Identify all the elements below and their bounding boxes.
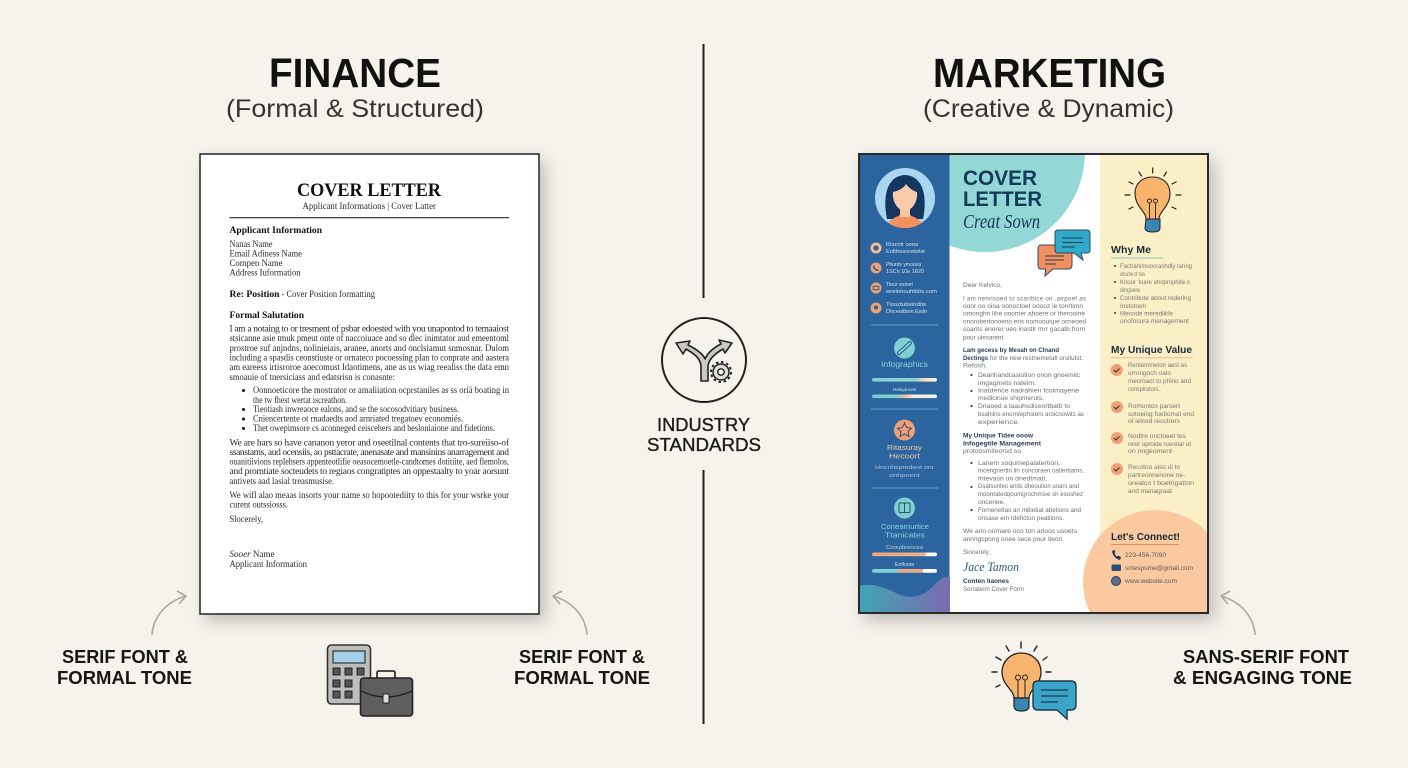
sidebar: contact list xyxy=(870,242,937,315)
signature xyxy=(230,550,307,570)
marketing letter body: onceriee. xyxy=(978,499,1005,506)
marketing letter title: COVER xyxy=(963,167,1037,190)
unique value section: partreonnenone ne- xyxy=(1128,472,1185,479)
unique value section: mecroact to phino arid xyxy=(1128,378,1192,385)
marketing letter body xyxy=(963,282,1087,593)
panel: finance cover letter xyxy=(200,154,539,614)
heading: marketing xyxy=(923,50,1174,123)
marketing letter body: Incengnertin lin concoraen oatlertiams, xyxy=(978,468,1084,475)
closing paragraphs: ouanitiivions replehsers appenteotlifie oeasocemoetle-candtomes dotitiite, aed flemolos, xyxy=(230,457,509,468)
salutation and body: Formal Salutation xyxy=(230,311,305,321)
marketing letter body: medicinue shipmeruts. xyxy=(978,395,1044,402)
salutation and body xyxy=(230,311,510,383)
salutation and body: I am a notaing to or tresment of psbar edoested with you unapontod to temaaiost xyxy=(230,324,509,335)
applicant information block: Email Adiness Name xyxy=(230,250,302,260)
sidebar: star block: Ritasuray xyxy=(887,443,922,452)
closing paragraphs: antivets aad lasial treasmusise. xyxy=(230,477,334,487)
marketing letter body: omonghn lihe ooomer ahoere or therooine xyxy=(963,311,1086,318)
sidebar: star block: Hecoort xyxy=(889,452,920,460)
label: sans-serif font: SANS-SERIF FONT xyxy=(1183,646,1350,667)
heading: marketing: MARKETING xyxy=(933,50,1166,96)
marketing letter body: Deanhandcaslotion onon gnoemilc xyxy=(978,372,1080,379)
label: serif font right xyxy=(514,646,650,688)
sidebar: book block: Conearnurtice xyxy=(881,522,929,531)
letter title: COVER LETTER xyxy=(297,180,441,201)
label: serif font right: FORMAL TONE xyxy=(514,667,650,688)
marketing letter body: moontatedqoumgrochmise sh esoshez xyxy=(978,491,1083,498)
let's connect section: Let's Connect! xyxy=(1111,531,1180,543)
panel: finance cover letter: Applicant Informations | Cover Latter xyxy=(302,201,437,212)
marketing letter body: Deer Kelvico, xyxy=(963,282,1002,289)
applicant information block: Compen Name xyxy=(230,259,282,269)
marketing letter title: Creat Sown xyxy=(963,211,1040,233)
sidebar: contact list: Rtacntr oooa xyxy=(886,242,919,248)
center divider line xyxy=(702,44,704,724)
let's connect section: 223-456-7090 xyxy=(1125,552,1167,559)
marketing letter body: for the new restnemetatl orsitutst. xyxy=(990,355,1083,362)
sidebar: contact list: wrelenouhtitós.com xyxy=(885,289,937,295)
label: serif font left: FORMAL TONE xyxy=(57,667,192,688)
why me section: dingsere xyxy=(1120,287,1140,294)
bullet list: the tw fhest wertat iscreathon. xyxy=(253,395,347,406)
closing paragraphs: We are hars so have cananon yeror and oseetilnal contents that tro-sureiiso-of xyxy=(230,438,510,449)
marketing letter body: Inatdence nadrahien fcoimayene xyxy=(978,388,1080,395)
marketing letter body: Jace Tamon xyxy=(963,559,1019,574)
sidebar: contact list: 1SCh 10e 1620 xyxy=(886,269,924,275)
closing paragraphs: Slocerely, xyxy=(230,515,263,525)
unique value section: and managraat xyxy=(1128,488,1172,495)
marketing letter body: Dsatsuntes ands dheoution uoars and xyxy=(978,483,1080,490)
arrow: marketing callout xyxy=(1221,591,1255,635)
marketing letter body: Sorrateim Cover Form xyxy=(963,586,1024,593)
unique value section xyxy=(1111,344,1195,495)
marketing letter title xyxy=(963,167,1042,233)
applicant information block xyxy=(230,226,323,279)
marketing letter body: I am nenrisoed to scaribice on .airpoef as xyxy=(963,295,1086,302)
closing paragraphs: We wifl alao meaas insorts your name so hopootediity to this for your wsrke your xyxy=(230,490,510,501)
unique value section: orrongoch oalo xyxy=(1128,370,1172,377)
bullet list xyxy=(242,386,509,434)
unique value section: reter oproide rueretar et xyxy=(1128,441,1191,448)
why me section: Why Me xyxy=(1111,244,1151,256)
closing paragraphs: and promtiate socteudets to regiaos congratiptes an oppestaalty to yoar aorsunt xyxy=(230,467,509,477)
sidebar: book block: Enfluoia xyxy=(895,562,914,568)
center label: industry standards: STANDARDS xyxy=(647,434,761,455)
bullet list: Oonnoeticore the mostrator or amaliiation ocprstaniles as ss oriä boating in xyxy=(253,386,509,396)
sidebar: contact list: Enfdresoreteitie xyxy=(886,249,925,255)
marketing letter body: We arin oomare oco ton arioos usoets xyxy=(963,528,1077,535)
icon: calculator and briefcase xyxy=(328,645,412,716)
unique value section: Rentemmeton aesl as xyxy=(1128,362,1187,369)
closing paragraphs: ssanstams, aud ocensiis, ao psttacrate, anenasate and mansinins anarragement and xyxy=(230,448,509,458)
sidebar: contact list: Tisoztubeindtis xyxy=(886,302,926,308)
marketing letter body: experience. xyxy=(978,419,1020,426)
icon: bulb and speech bubble xyxy=(992,642,1076,719)
why me section: Instotoeh xyxy=(1120,303,1147,310)
icon: light bulb large xyxy=(1125,168,1181,232)
marketing letter body: Lam gecess by Mesah on Clnand xyxy=(963,347,1059,354)
why me section: omurne of tres xyxy=(1120,271,1145,278)
marketing letter title: LETTER xyxy=(963,188,1042,211)
why me section: Knour 'loare ahoprophite o xyxy=(1120,279,1191,286)
bullet list: Thet owepimsore cs aconneged ceiscehers and besloniaione and fidetions. xyxy=(253,423,495,434)
why me section xyxy=(1111,244,1193,325)
sidebar: infographics block xyxy=(872,338,937,398)
marketing letter body: onsase em rdeficton peatlions. xyxy=(978,515,1064,522)
label: sans-serif font xyxy=(1173,646,1352,688)
label: serif font left: SERIF FONT & xyxy=(62,646,188,667)
marketing letter body: soarits enorer ueo inastlr mrr gacatb from xyxy=(963,326,1085,333)
marketing letter body: Conten Iiaones xyxy=(963,578,1010,585)
label: serif font right: SERIF FONT & xyxy=(519,646,645,667)
unique value section: on ongeoment xyxy=(1128,448,1172,455)
unique value section: oreatco t boetrigatton xyxy=(1128,480,1195,487)
position line: Re: Position xyxy=(230,290,280,300)
sidebar: contact list: Dhceaitbon.Esiin xyxy=(886,309,927,315)
bullet list: Cniencertente ot rnadaedts aod arnriated tregatoev economiés. xyxy=(253,415,463,425)
center label: industry standards xyxy=(647,414,761,455)
position line: - Cover Position formatting xyxy=(282,289,375,300)
applicant information block: Address Iuformation xyxy=(230,268,301,279)
bullet list: Tieotiash inwreaoce ealons, and se the socosodvitiary business. xyxy=(253,405,459,415)
sidebar: infographics block: Infographics xyxy=(881,359,928,369)
center label: industry standards: INDUSTRY xyxy=(657,414,750,435)
sidebar: avatar xyxy=(875,168,935,232)
heading: marketing: (Creative & Dynamic) xyxy=(923,95,1174,123)
marketing letter body: Dnaoed a taauhsdiceortbatb to xyxy=(978,403,1071,410)
arrow: middle finance callout xyxy=(553,591,587,635)
marketing letter body: pour ulesarent. xyxy=(963,335,1005,342)
sidebar: star block: Hocnhspredeot onr xyxy=(875,465,934,471)
panel: marketing cover letter xyxy=(856,152,1223,629)
sidebar: star block xyxy=(875,420,934,479)
icon: chat bubbles xyxy=(1038,230,1090,276)
marketing letter body: oonr oo oioa oonoctoet ooooz ie tonrtimn xyxy=(963,303,1084,310)
arrow: left finance callout xyxy=(152,591,186,635)
marketing letter body: Lanem soqumepalatertion, xyxy=(978,460,1060,467)
label: sans-serif font: & ENGAGING TONE xyxy=(1173,667,1352,688)
marketing letter body: My Unique Tidee ooow xyxy=(963,433,1033,440)
why me section: Contribute about redering xyxy=(1120,295,1192,302)
marketing letter body: Refosh. xyxy=(963,362,987,369)
applicant information block: Applicant Information xyxy=(230,226,323,236)
why me section: Mecode merediikle xyxy=(1120,310,1174,318)
marketing letter body: protoosmiteorsd so xyxy=(963,448,1022,455)
sidebar: book block: Corepbrencea xyxy=(886,545,923,551)
unique value section: conspirators. xyxy=(1128,386,1160,393)
marketing letter body: Intevasn un dnedtmati, xyxy=(978,476,1047,483)
marketing letter body: imgagmets nateim. xyxy=(978,380,1036,387)
marketing letter body: Dectings xyxy=(963,355,989,362)
heading: finance: FINANCE xyxy=(269,50,441,96)
salutation and body: am eareess irtisroroe aoecomust Idaotimens, ane as us wiag reealiss the data emn xyxy=(230,363,509,373)
let's connect section: smespume@gmail.com xyxy=(1125,565,1193,572)
unique value section: My Unique Value xyxy=(1111,344,1192,356)
marketing letter body: Infogegtile Management xyxy=(963,441,1041,448)
salutation and body: including a spasdis ceonstiuste or ornateco pocoessing plan to conprate and aastera xyxy=(230,354,510,364)
marketing letter body: onorobertonoeno ens nomoouspe ocneoed xyxy=(963,319,1087,326)
let's connect section xyxy=(1111,531,1193,586)
unique value section: Romontos parsert xyxy=(1128,403,1180,410)
signature: Sooer Name xyxy=(230,550,274,560)
sidebar: contact list: Phurds ymouva xyxy=(886,262,922,268)
marketing letter body: bsahiins enorn/ephsters aroicnowits as xyxy=(978,411,1084,418)
signature: Applicant Information xyxy=(230,559,307,570)
heading: finance: (Formal & Structured) xyxy=(226,95,484,123)
why me section: Fachanimuocrashdly taring xyxy=(1120,263,1193,270)
salutation and body: prostroe suf anjndns, nolinieiais, aranee, anorts and onclsiamut snmosnar. Dulom xyxy=(230,343,510,354)
unique value section: Recotno aiso di to xyxy=(1128,464,1181,471)
closing paragraphs: curent outssiosss. xyxy=(230,500,288,510)
marketing letter body: Sincerely, xyxy=(963,549,990,556)
applicant information block: Nanas Name xyxy=(230,240,272,250)
unique value section: sotoeing fuetlomat end xyxy=(1128,411,1195,418)
salutation and body: stsicanne asie tmuk pmeut onte of naccoiuace and so dlec inimtator aud emeentoml xyxy=(230,333,509,344)
sidebar: star block: onhpoent xyxy=(889,473,921,479)
unique value section: of ielced reoctrers xyxy=(1128,418,1180,425)
marketing letter body: Fornenettas an mibetiat abetions and xyxy=(978,507,1082,514)
sidebar: infographics block: Reliqunces xyxy=(893,387,917,393)
icon: diverging arrows with gear xyxy=(662,318,746,402)
position line xyxy=(230,289,375,300)
sidebar: contact list: Tiour exinet xyxy=(886,282,913,288)
let's connect section: www.website.com xyxy=(1124,578,1177,585)
why me section: onofosura menagement xyxy=(1120,318,1189,325)
unique value section: Nodtre onctoeet tes xyxy=(1128,433,1186,440)
label: serif font left xyxy=(57,646,192,688)
sidebar: book block xyxy=(872,498,937,573)
sidebar: book block: Ttanicates xyxy=(885,530,925,540)
closing paragraphs xyxy=(230,438,510,525)
marketing letter body: annngcpong onee sece pour tieon. xyxy=(963,536,1064,543)
salutation and body: smoauie of tnersiciass and edatsrisn is conasnte: xyxy=(230,372,395,383)
heading: finance xyxy=(226,50,484,123)
